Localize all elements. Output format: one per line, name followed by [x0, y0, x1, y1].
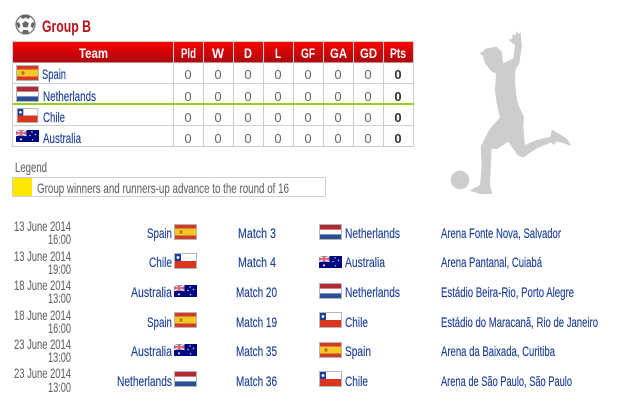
table header: [13, 42, 413, 62]
row: Australia: 0: [184, 131, 192, 146]
match 4: Australia: [345, 254, 385, 270]
row: Australia: [16, 130, 402, 146]
match 19: 16:00: [48, 320, 71, 336]
match 20: Estádio Beira-Rio, Porto Alegre: [441, 284, 574, 300]
row: Netherlands: 0: [394, 89, 402, 104]
row: Chile: 0: [184, 110, 192, 125]
row: Australia: 0: [394, 131, 402, 146]
row: Netherlands: Netherlands: [43, 88, 96, 104]
row: Chile: 0: [274, 110, 282, 125]
match 36: Arena de São Paulo, São Paulo: [441, 373, 572, 389]
match 3: Netherlands: [345, 225, 400, 241]
table header: Pld: [181, 46, 196, 61]
row: Netherlands: 0: [304, 89, 312, 104]
match 36: Match 36: [236, 373, 277, 389]
match 36: [14, 365, 572, 395]
row: Australia: 0: [274, 131, 282, 146]
match 19: Chile: [345, 314, 368, 330]
icon: soccer ball: [16, 15, 35, 34]
match 36: 23 June 2014: [14, 365, 71, 381]
table header: GF: [301, 46, 315, 61]
match 3: 16:00: [48, 231, 71, 247]
table header: Team: [79, 46, 108, 61]
match 4: Chile: [149, 254, 172, 270]
match 19: Spain: [147, 314, 172, 330]
row: Spain: 0: [394, 67, 402, 82]
match schedule: [14, 218, 598, 395]
match 20: Australia: [131, 284, 172, 300]
match 19: 18 June 2014: [14, 307, 71, 323]
match 4: Match 4: [238, 254, 276, 270]
row: Spain: 0: [274, 67, 282, 82]
row: Spain: 0: [304, 67, 312, 82]
match 4: 13 June 2014: [14, 248, 71, 264]
row: Chile: Chile: [43, 109, 65, 125]
match 20: 18 June 2014: [14, 277, 71, 293]
row: Australia: 0: [244, 131, 252, 146]
match 4: [14, 248, 542, 277]
row: Spain: 0: [364, 67, 372, 82]
match 36: Netherlands: [117, 373, 172, 389]
row: Spain: 0: [244, 67, 252, 82]
row: Chile: 0: [394, 110, 402, 125]
title: Group B: [42, 18, 91, 36]
row: Netherlands: 0: [364, 89, 372, 104]
match 35: Arena da Baixada, Curitiba: [441, 343, 555, 359]
match 3: Match 3: [238, 225, 276, 241]
table header: GA: [330, 46, 347, 61]
match 3: Spain: [147, 225, 172, 241]
match 35: 23 June 2014: [14, 336, 71, 352]
row: Spain: [16, 65, 402, 82]
match 20: 13:00: [48, 290, 71, 306]
table header: GD: [360, 46, 377, 61]
match 19: [14, 307, 598, 336]
silhouette: football player kicking ball: [451, 31, 572, 194]
row: Australia: 0: [304, 131, 312, 146]
table header: D: [244, 46, 252, 61]
match 35: Match 35: [236, 343, 277, 359]
row: Australia: 0: [214, 131, 222, 146]
row: Spain: Spain: [42, 66, 66, 82]
match 20: Netherlands: [345, 284, 400, 300]
match 36: Chile: [345, 373, 368, 389]
row: Australia: Australia: [43, 130, 81, 146]
match 35: 13:00: [48, 349, 71, 365]
row: Netherlands: 0: [214, 89, 222, 104]
row: Netherlands: 0: [244, 89, 252, 104]
row: Spain: 0: [334, 67, 342, 82]
row: Netherlands: 0: [274, 89, 282, 104]
match 36: 13:00: [48, 379, 71, 395]
row: Chile: 0: [304, 110, 312, 125]
match 20: Match 20: [236, 284, 277, 300]
row: Spain: 0: [184, 67, 192, 82]
row: Chile: [17, 108, 402, 125]
row: Chile: 0: [244, 110, 252, 125]
row: Netherlands: 0: [184, 89, 192, 104]
row: Chile: 0: [364, 110, 372, 125]
row: Australia: 0: [334, 131, 342, 146]
match 35: [14, 336, 555, 365]
row: Netherlands: [16, 86, 402, 104]
match 19: Match 19: [236, 314, 277, 330]
match 35: Spain: [345, 343, 371, 359]
match 35: Australia: [131, 343, 172, 359]
match 3: [14, 218, 561, 247]
table header: L: [275, 46, 281, 61]
match 4: 19:00: [48, 261, 71, 277]
match 4: Arena Pantanal, Cuiabá: [441, 254, 542, 270]
match 3: 13 June 2014: [14, 218, 71, 234]
row: Chile: 0: [214, 110, 222, 125]
row: Spain: 0: [214, 67, 222, 82]
row: Australia: 0: [364, 131, 372, 146]
row: Chile: 0: [334, 110, 342, 125]
row: Netherlands: 0: [334, 89, 342, 104]
match 3: Arena Fonte Nova, Salvador: [441, 225, 561, 241]
legend heading: Legend: [15, 159, 47, 175]
legend box: [12, 178, 326, 196]
match 20: [14, 277, 574, 306]
group standings table: [12, 42, 414, 146]
legend box: Group winners and runners-up advance to the round of 16: [37, 180, 289, 196]
table header: W: [212, 46, 224, 61]
table header: Pts: [390, 46, 406, 61]
